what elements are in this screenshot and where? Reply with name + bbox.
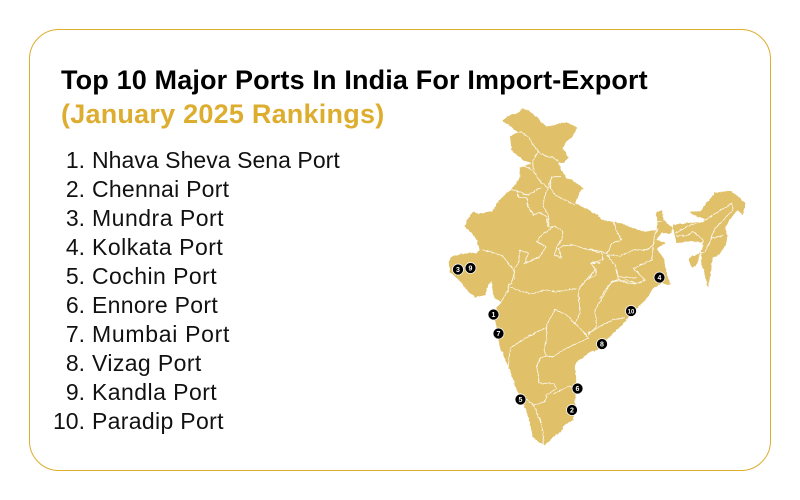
list item 2: Chennai Port: [92, 176, 229, 202]
marker 7: [493, 328, 504, 339]
map: port markers: [452, 262, 665, 416]
list item 8: 8.: [66, 350, 85, 376]
map: state borders, peninsula: [497, 270, 637, 445]
marker 9: [465, 262, 476, 274]
list item 1: 1.: [66, 147, 85, 173]
marker 1: [488, 309, 499, 320]
marker 5: 5: [519, 397, 523, 404]
list item 2: 2.: [66, 176, 85, 202]
marker 9: 9: [469, 266, 473, 272]
map: state borders, north-west: [482, 132, 600, 280]
marker 2: [566, 404, 578, 416]
ranked list of ports: [53, 147, 340, 434]
marker 4: 4: [658, 275, 662, 282]
list item 5: 5.: [66, 263, 85, 289]
marker 7: 7: [497, 331, 501, 338]
list item 5: Cochin Port: [92, 263, 217, 289]
list item 3: Mundra Port: [92, 205, 224, 231]
marker 4: [654, 272, 665, 283]
list item 4: 4.: [66, 234, 85, 260]
list item 1: Nhava Sheva Sena Port: [92, 147, 340, 173]
map: state borders, east and north-east: [590, 203, 733, 298]
marker 3: [452, 264, 464, 275]
map: landmass: [449, 108, 745, 445]
list item 7: 7.: [66, 321, 85, 347]
marker 8: [596, 338, 608, 350]
marker 6: [572, 383, 583, 394]
list item 9: Kandla Port: [92, 379, 217, 405]
list item 10: 10.: [53, 408, 85, 434]
list item 6: Ennore Port: [92, 292, 218, 318]
list item 9: 9.: [66, 379, 85, 405]
subtitle: (January 2025 Rankings): [61, 99, 384, 129]
list item 7: Mumbai Port: [92, 321, 230, 347]
list item 4: Kolkata Port: [92, 234, 223, 260]
list item 10: Paradip Port: [92, 408, 224, 434]
marker 2: 2: [570, 408, 574, 414]
list item 3: 3.: [66, 205, 85, 231]
marker 1: 1: [492, 312, 496, 319]
map geography: [449, 108, 745, 445]
marker 3: 3: [456, 267, 460, 274]
list item 6: 6.: [66, 292, 85, 318]
marker 5: [515, 394, 526, 405]
marker 10: 10: [628, 310, 635, 316]
marker 10: [626, 306, 636, 316]
marker 8: 8: [600, 342, 604, 348]
title: Top 10 Major Ports In India For Import-Export: [61, 65, 648, 95]
marker 6: 6: [576, 386, 580, 393]
list item 8: Vizag Port: [92, 350, 202, 376]
